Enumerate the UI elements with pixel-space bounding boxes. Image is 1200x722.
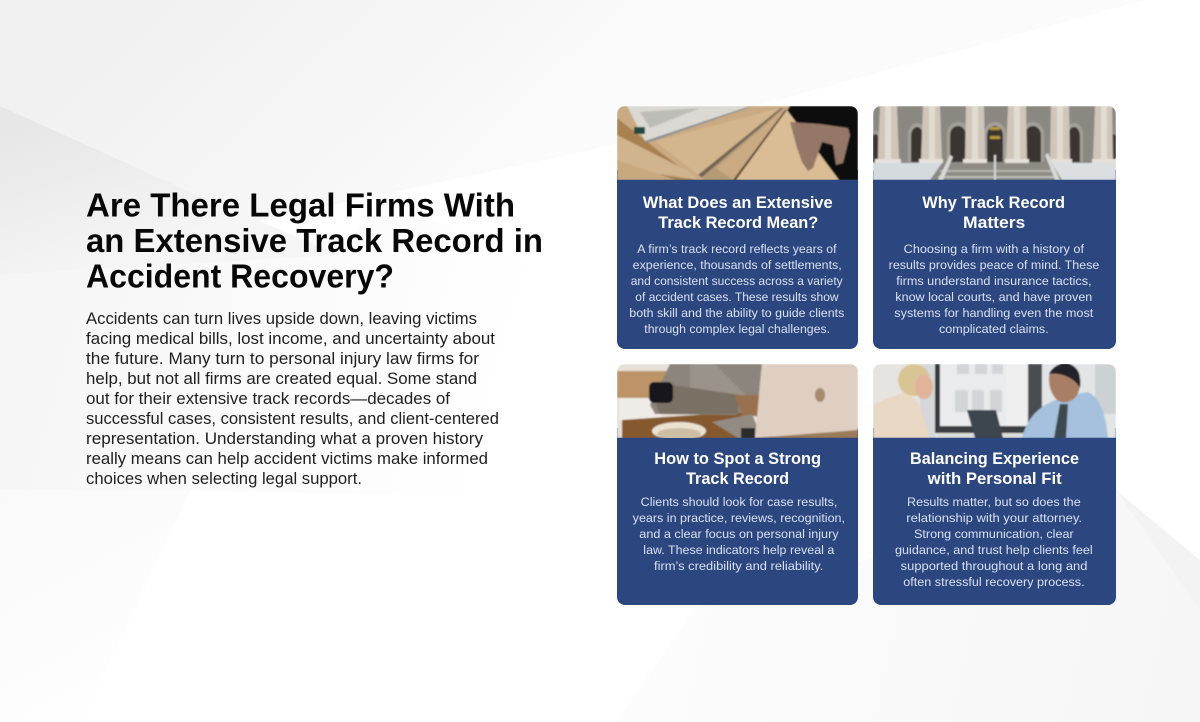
text block: supported throughout a long and — [901, 559, 1088, 573]
heading: Why Track Record — [922, 194, 1065, 212]
text block: of accident cases. These results show — [635, 290, 839, 304]
intro paragraph: out for their extensive track records—decades of — [86, 389, 450, 408]
image: person with laptop at wooden table — [617, 364, 858, 440]
heading: Track Record Mean? — [658, 214, 818, 232]
image: client meeting with attorney — [873, 363, 1116, 438]
heading: Balancing Experience — [910, 450, 1079, 468]
text block — [895, 495, 1093, 589]
text block: years in practice, reviews, recognition, — [633, 511, 845, 525]
text block: firm’s credibility and reliability. — [654, 559, 823, 573]
text block: both skill and the ability to guide clients — [629, 306, 844, 320]
text block: Clients should look for case results, — [641, 495, 837, 509]
intro paragraph: the future. Many turn to personal injury law firms for — [86, 349, 479, 368]
text block: Choosing a firm with a history of — [904, 242, 1085, 256]
text block: firms understand insurance tactics, — [896, 274, 1092, 288]
heading: Track Record — [686, 470, 789, 488]
text block: A firm’s track record reflects years of — [637, 242, 837, 256]
text block — [633, 495, 845, 573]
intro paragraph: choices when selecting legal support. — [86, 469, 362, 488]
intro paragraph: really means can help accident victims make informed — [86, 449, 488, 468]
heading: with Personal Fit — [927, 470, 1062, 488]
heading: What Does an Extensive — [643, 194, 833, 212]
text block: and consistent success across a variety — [631, 274, 844, 288]
heading — [654, 450, 821, 488]
main title: an Extensive Track Record in — [86, 223, 543, 260]
heading — [910, 450, 1079, 488]
text block: Strong communication, clear — [914, 527, 1074, 541]
heading — [922, 194, 1065, 232]
image: manila folders and hand — [617, 106, 858, 180]
text block: often stressful recovery process. — [903, 575, 1085, 589]
heading: Matters — [963, 214, 1025, 232]
main title — [86, 188, 543, 296]
text block: experience, thousands of settlements, — [633, 258, 842, 272]
panel: how to spot a strong track record — [617, 364, 858, 605]
text block — [889, 242, 1100, 336]
panel: why track record matters — [871, 106, 1116, 349]
intro paragraph: representation. Understanding what a proven history — [86, 429, 484, 448]
intro paragraph: facing medical bills, lost income, and uncertainty about — [86, 329, 495, 348]
heading — [643, 194, 833, 232]
text block: through complex legal challenges. — [644, 322, 830, 336]
image: courthouse columns and steps — [871, 106, 1116, 180]
intro paragraph: successful cases, consistent results, and client-centered — [86, 409, 499, 428]
text block: know local courts, and have proven — [895, 290, 1092, 304]
intro paragraph: help, but not all firms are created equal. Some stand — [86, 369, 477, 388]
text block: Results matter, but so does the — [907, 495, 1081, 509]
text block: and a clear focus on personal injury — [639, 527, 839, 541]
main title: Are There Legal Firms With — [86, 188, 515, 224]
text block: results provides peace of mind. These — [889, 258, 1100, 272]
main title: Accident Recovery? — [86, 258, 394, 296]
text block — [629, 242, 844, 336]
panel: balancing experience with personal fit — [873, 363, 1116, 605]
panel: what does an extensive track record mean — [617, 106, 858, 349]
heading: How to Spot a Strong — [654, 450, 821, 468]
text block: law. These indicators help reveal a — [643, 543, 834, 557]
intro paragraph: Accidents can turn lives upside down, leaving victims — [86, 309, 477, 328]
text block: guidance, and trust help clients feel — [895, 543, 1093, 557]
intro paragraph — [86, 309, 499, 488]
text block: systems for handling even the most — [894, 306, 1094, 320]
text block: complicated claims. — [939, 322, 1049, 336]
text block: relationship with your attorney. — [906, 511, 1082, 525]
